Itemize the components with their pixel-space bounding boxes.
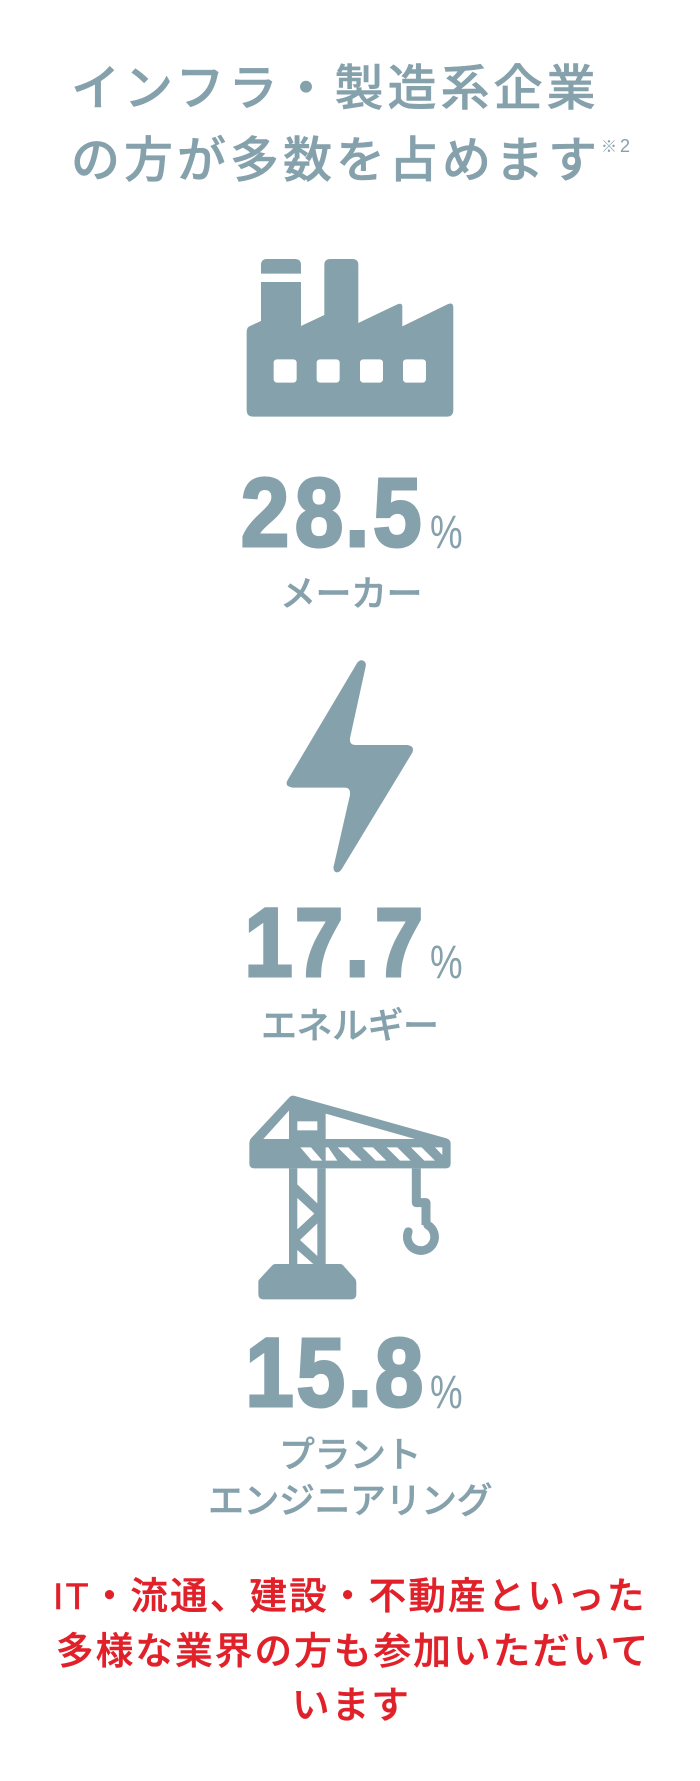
label: plant engineering: エンジニアリング	[208, 1480, 492, 1521]
stat: 28.5%: 28.5	[241, 458, 422, 567]
title: 2	[620, 136, 630, 156]
label: plant engineering: プラント	[279, 1434, 421, 1475]
stat: 15.8%: %	[430, 1366, 463, 1418]
stat: 15.8%: 15.8	[245, 1318, 423, 1427]
title: ※	[601, 139, 617, 156]
icon: tower crane	[249, 1096, 451, 1299]
callout: red summary	[53, 1575, 650, 1726]
label: maker: メーカー	[280, 573, 422, 614]
stat: 28.5%: %	[430, 506, 463, 558]
icon: factory	[247, 259, 453, 417]
label: energy: エネルギー	[261, 1005, 439, 1046]
callout: red summary: 多様な業界の方も参加いただいて	[56, 1630, 650, 1672]
title: インフラ・製造系企業	[71, 62, 600, 116]
title	[71, 62, 630, 188]
label: plant engineering	[208, 1434, 492, 1521]
stat: 17.7%: %	[430, 936, 463, 988]
callout: red summary: います	[292, 1684, 411, 1726]
icon: lightning bolt	[287, 660, 413, 872]
title: の方が多数を占めます	[71, 134, 601, 188]
stat: 17.7%: 17.7	[244, 888, 423, 997]
callout: red summary: IT・流通、建設・不動産といった	[53, 1575, 647, 1617]
